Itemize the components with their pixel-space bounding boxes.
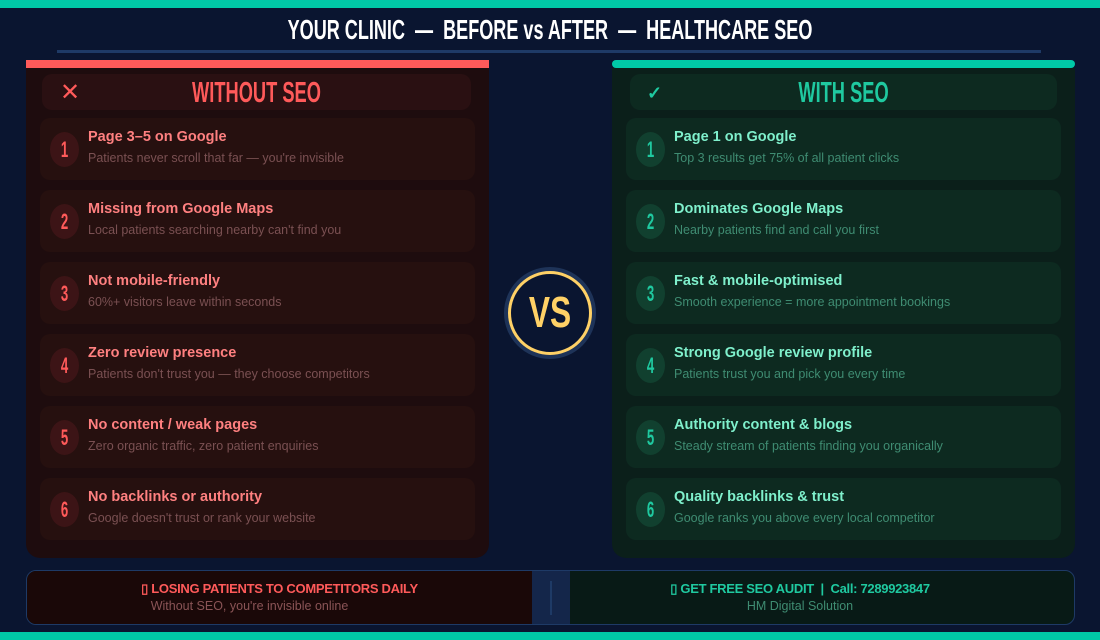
top bar (0, 0, 1100, 8)
item 5 (626, 406, 1061, 468)
item 5: Authority content & blogs (674, 417, 852, 433)
item 2: Dominates Google Maps (674, 201, 843, 217)
title: YOUR CLINIC — BEFORE vs AFTER — HEALTHCARE SEO (288, 14, 812, 45)
panel: without SEO (26, 60, 489, 558)
footer left: warning: ▯ LOSING PATIENTS TO COMPETITORS DAILY (141, 581, 418, 596)
icon: VS badge (504, 267, 596, 359)
item 5: No content / weak pages (88, 417, 257, 433)
footer left: warning: Without SEO, you're invisible online (151, 599, 348, 613)
item 4 (40, 334, 475, 396)
item 4: 4 (647, 353, 654, 378)
icon: check: ✓ (647, 83, 662, 103)
item 3 (40, 262, 475, 324)
item 4: Patients don't trust you — they choose competitors (88, 367, 370, 381)
item 1 (40, 118, 475, 180)
item 4: Zero review presence (88, 345, 236, 361)
item 2 (626, 190, 1061, 252)
item 4 (626, 334, 1061, 396)
item 6: 6 (61, 497, 68, 522)
item 2: Missing from Google Maps (88, 201, 273, 217)
icon: VS badge: VS (529, 288, 571, 337)
item 5: Zero organic traffic, zero patient enquiries (88, 439, 318, 453)
item 5: 5 (61, 425, 68, 450)
item 3: 3 (61, 281, 68, 306)
item 2: Local patients searching nearby can't find you (88, 223, 341, 237)
header: without SEO: WITHOUT SEO (192, 77, 321, 109)
item 6: Google ranks you above every local competitor (674, 511, 935, 525)
header: without SEO (42, 74, 471, 110)
item 4: Patients trust you and pick you every time (674, 367, 905, 381)
item 2: 2 (647, 209, 654, 234)
item 5: Steady stream of patients finding you organically (674, 439, 943, 453)
item 6: Google doesn't trust or rank your website (88, 511, 316, 525)
item 1: 1 (647, 137, 654, 162)
item 3: 60%+ visitors leave within seconds (88, 295, 282, 309)
item 6: 6 (647, 497, 654, 522)
item 3: Smooth experience = more appointment bookings (674, 295, 950, 309)
item 1: Page 3–5 on Google (88, 129, 227, 145)
item 3: Fast & mobile-optimised (674, 273, 842, 289)
footer right: CTA: HM Digital Solution (747, 599, 853, 613)
footer right: CTA (670, 581, 930, 613)
item 2: Nearby patients find and call you first (674, 223, 879, 237)
item 1: Top 3 results get 75% of all patient clicks (674, 151, 899, 165)
footer right: CTA: ▯ GET FREE SEO AUDIT | Call: 7289923847 (670, 581, 930, 596)
footer left: warning (27, 571, 532, 626)
header: with SEO (630, 74, 1057, 110)
footer banner (26, 570, 1075, 625)
item 2 (40, 190, 475, 252)
item 3: Not mobile-friendly (88, 273, 220, 289)
item 6: Quality backlinks & trust (674, 489, 844, 505)
item 6 (40, 478, 475, 540)
item 3 (626, 262, 1061, 324)
item 1 (626, 118, 1061, 180)
item 1: 1 (61, 137, 68, 162)
item 6 (626, 478, 1061, 540)
icon: cross: ✕ (60, 79, 80, 106)
item 2: 2 (61, 209, 68, 234)
item 1: Patients never scroll that far — you're invisible (88, 151, 344, 165)
item 6: No backlinks or authority (88, 489, 262, 505)
panel: with SEO (612, 60, 1075, 558)
item 3: 3 (647, 281, 654, 306)
item 1: Page 1 on Google (674, 129, 796, 145)
item 5 (40, 406, 475, 468)
item 5: 5 (647, 425, 654, 450)
header: with SEO: WITH SEO (798, 77, 889, 109)
bottom bar (0, 632, 1100, 640)
item 4: 4 (61, 353, 68, 378)
item 4: Strong Google review profile (674, 345, 872, 361)
